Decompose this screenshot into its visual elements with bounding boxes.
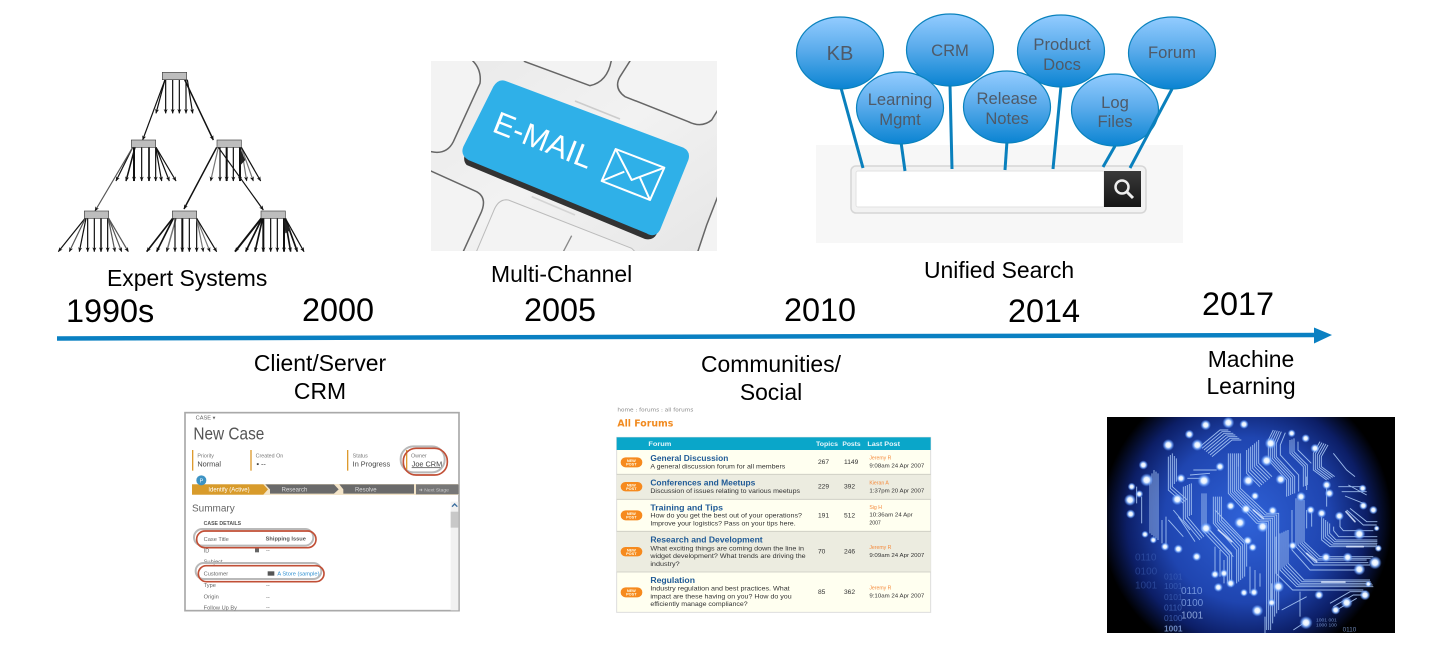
binary digits: 0110 xyxy=(1164,603,1182,613)
form fields: -- xyxy=(266,560,270,566)
envelope icon xyxy=(602,149,664,200)
forum descriptions xyxy=(649,463,806,608)
header fields: In Progress xyxy=(353,460,390,469)
timeline arrow xyxy=(57,328,1332,344)
binary digits: 0101 xyxy=(1164,592,1183,602)
last post info: Kieran A xyxy=(869,480,889,486)
bright trace highlights xyxy=(1218,510,1363,582)
forum descriptions: How do you get the best out of your operations? xyxy=(650,513,803,520)
CRM new case form screenshot xyxy=(185,413,459,611)
form fields: Subject xyxy=(204,560,223,566)
last post info: Sig H xyxy=(869,505,882,511)
label: Communities/Social: Social xyxy=(740,379,802,405)
forum title: All Forums xyxy=(617,418,674,429)
bubble: Product Docs xyxy=(1018,15,1104,87)
bubble: Release Notes: Notes xyxy=(985,109,1029,128)
glowing nodes xyxy=(1124,417,1382,629)
form fields: Case Title xyxy=(204,537,229,543)
form fields: CASE DETAILS xyxy=(204,521,242,527)
form title: New Case xyxy=(193,423,264,443)
topic and post counts: 229 xyxy=(818,484,829,491)
form fields: -- xyxy=(266,605,270,611)
circuit brain image xyxy=(1107,417,1395,633)
table header: Last Post xyxy=(867,441,901,448)
last post info xyxy=(869,456,924,600)
circuit traces xyxy=(1137,430,1377,633)
last post info: Jeremy R xyxy=(869,456,892,462)
neighbouring keyboard keys xyxy=(425,55,725,255)
form fields: Shipping Issue xyxy=(266,537,306,543)
stage bar xyxy=(192,475,459,495)
header fields: Status xyxy=(353,453,368,459)
bubble: Product Docs: Product xyxy=(1033,35,1091,54)
forum descriptions: widget development? What trends are driving the xyxy=(649,553,806,560)
forum descriptions: What exciting things are coming down the line in xyxy=(650,545,805,552)
last post info: 10:36am 24 Apr xyxy=(869,513,913,519)
bubble: KB xyxy=(796,17,884,89)
label: Machine Learning: Machine xyxy=(1208,346,1294,372)
header fields: Priority xyxy=(197,453,214,459)
bubble: Log Files: Log xyxy=(1101,93,1129,112)
year: 2014: 2014 xyxy=(1008,293,1080,329)
table: POST xyxy=(626,487,637,491)
topic and post counts: 191 xyxy=(818,513,829,520)
form fields: A Store (sample) xyxy=(277,571,320,577)
forum names xyxy=(650,454,763,585)
label: Client/Server CRM: Client/Server xyxy=(254,350,387,376)
year: 2005: 2005 xyxy=(524,292,596,328)
search box xyxy=(851,166,1146,213)
table: NEW xyxy=(627,589,636,593)
table xyxy=(617,437,931,612)
binary digits: 1001 xyxy=(1181,611,1204,622)
topic and post counts: 362 xyxy=(844,589,855,596)
CRM new case form screenshot: CASE ▾ xyxy=(196,416,216,422)
forum connector xyxy=(1130,89,1172,168)
stage bar: ➜ Next Stage xyxy=(419,487,449,493)
forum names: Research and Development xyxy=(650,536,763,545)
table: POST xyxy=(626,516,637,520)
bubble: Forum: Forum xyxy=(1148,43,1196,62)
header fields xyxy=(192,450,442,471)
binary digits: 0100 xyxy=(1164,613,1183,623)
table: NEW xyxy=(627,548,636,552)
binary digits: 1001 xyxy=(1135,580,1158,591)
year: 1990s: 1990s xyxy=(66,293,154,329)
label: Multi-Channel: Multi-Channel xyxy=(491,261,632,287)
header fields: Normal xyxy=(197,460,221,469)
forum descriptions: Improve your logistics? Pass on your tips here. xyxy=(650,521,796,528)
forum descriptions: efficiently manage compliance? xyxy=(650,601,748,608)
table: POST xyxy=(626,593,637,597)
bubble: Log Files xyxy=(1072,74,1158,146)
bubble: CRM xyxy=(906,14,994,86)
last post info: Jeremy R xyxy=(869,586,892,592)
topic and post counts: 392 xyxy=(844,484,855,491)
topic and post counts: 70 xyxy=(818,549,826,556)
bubble: Forum xyxy=(1128,17,1216,89)
binary digits: 0110 xyxy=(1135,553,1157,564)
table: POST xyxy=(626,552,637,556)
form fields: Customer xyxy=(204,572,228,578)
bubble: Release Notes xyxy=(964,71,1050,143)
form fields: ID xyxy=(204,549,209,555)
last post info: 1:37pm 20 Apr 2007 xyxy=(869,488,924,494)
unified search panel xyxy=(816,145,1183,243)
bubble: Learning Mgmt: Learning xyxy=(868,90,932,109)
binary digits: 0100 xyxy=(1181,598,1204,609)
bubble: Learning Mgmt: Mgmt xyxy=(879,110,921,129)
new-post badges xyxy=(621,457,642,597)
label: Expert Systems: Expert Systems xyxy=(107,265,267,291)
form fields: -- xyxy=(266,583,270,589)
bubble: Log Files: Files xyxy=(1097,112,1133,131)
bubble: Release Notes: Release xyxy=(977,89,1037,108)
table: POST xyxy=(626,463,637,467)
binary digits: 0110 xyxy=(1181,586,1203,597)
form fields: Follow Up By xyxy=(204,605,237,611)
stage bar: Identify (Active) xyxy=(208,487,250,493)
stage bar: Research xyxy=(282,487,307,493)
form fields: Type xyxy=(204,583,216,589)
binary digits: 1001 xyxy=(1164,623,1183,633)
topic and post counts: 85 xyxy=(818,589,826,596)
decision tree diagram xyxy=(58,72,304,252)
binary digits: 0101 xyxy=(1164,571,1183,581)
bubble: CRM: CRM xyxy=(931,41,969,60)
last post info: 9:08am 24 Apr 2007 xyxy=(869,464,924,470)
form fields: Summary xyxy=(192,504,235,515)
table header xyxy=(648,441,901,448)
forum list screenshot: home : forums : all forums xyxy=(617,408,694,414)
key lettering: E-MAIL xyxy=(488,105,598,176)
binary digits: 1000 100 xyxy=(1316,623,1337,629)
stage bar: Resolve xyxy=(355,487,377,493)
binary digits: 0100 xyxy=(1135,567,1158,578)
form fields xyxy=(192,504,320,611)
topic and post counts: 267 xyxy=(818,459,829,466)
last post info: Jeremy R xyxy=(869,545,892,551)
forum descriptions: industry? xyxy=(650,561,680,568)
forum descriptions: Industry regulation and best practices. What xyxy=(650,585,790,592)
last post info: 2007 xyxy=(869,520,881,526)
label: Machine Learning: Learning xyxy=(1206,373,1296,399)
email key photo xyxy=(425,55,725,255)
header fields: Owner xyxy=(411,453,427,459)
forum descriptions: impact are these having on you? How do you xyxy=(650,593,792,600)
year: 2017: 2017 xyxy=(1202,286,1274,322)
form fields: -- xyxy=(266,594,270,600)
topic and post counts: 1149 xyxy=(844,459,859,466)
last post info: 9:09am 24 Apr 2007 xyxy=(869,553,924,559)
forum names: General Discussion xyxy=(650,454,728,463)
header fields: ▪ -- xyxy=(256,460,266,469)
highlight ovals xyxy=(194,446,447,582)
scrollbar xyxy=(451,502,458,610)
label: Unified Search: Unified Search xyxy=(924,257,1074,283)
forum descriptions: Discussion of issues relating to various meetups xyxy=(650,488,800,495)
year: 2010: 2010 xyxy=(784,292,856,328)
binary digits: 1001 xyxy=(1164,581,1183,591)
topic and post counts: 512 xyxy=(844,513,855,520)
table: NEW xyxy=(627,512,636,516)
year: 2000: 2000 xyxy=(302,292,374,328)
table header: Forum xyxy=(648,441,671,448)
binary digits: 0110 xyxy=(1343,626,1357,633)
topic and post counts xyxy=(818,459,859,596)
table header: Posts xyxy=(842,441,861,448)
blue key xyxy=(464,156,657,240)
bubble: Learning Mgmt xyxy=(856,72,944,144)
header fields: Joe CRM xyxy=(412,459,442,468)
last post info: 9:10am 24 Apr 2007 xyxy=(869,594,924,600)
binary digits: 1001 001 xyxy=(1316,617,1337,623)
table: NEW xyxy=(627,483,636,487)
topic and post counts: 246 xyxy=(844,549,855,556)
table: NEW xyxy=(627,459,636,463)
form fields: -- xyxy=(266,548,270,554)
bubble: KB: KB xyxy=(827,43,853,65)
forum names: Training and Tips xyxy=(650,503,724,512)
forum names: Conferences and Meetups xyxy=(650,479,756,488)
forum descriptions: A general discussion forum for all members xyxy=(650,463,785,470)
binary digits xyxy=(1135,553,1357,633)
stage bar: P xyxy=(200,478,204,484)
label: Communities/Social: Communities/ xyxy=(701,351,842,377)
source bubbles connected to search xyxy=(796,14,1216,171)
form fields: Origin xyxy=(204,594,219,600)
connector lines xyxy=(841,85,1115,171)
table header: Topics xyxy=(816,441,838,448)
label: Client/Server CRM: CRM xyxy=(294,378,346,404)
header fields: Created On xyxy=(256,453,283,459)
forum list screenshot xyxy=(617,408,931,612)
forum names: Regulation xyxy=(650,576,695,585)
bubble: Product Docs: Docs xyxy=(1043,55,1081,74)
